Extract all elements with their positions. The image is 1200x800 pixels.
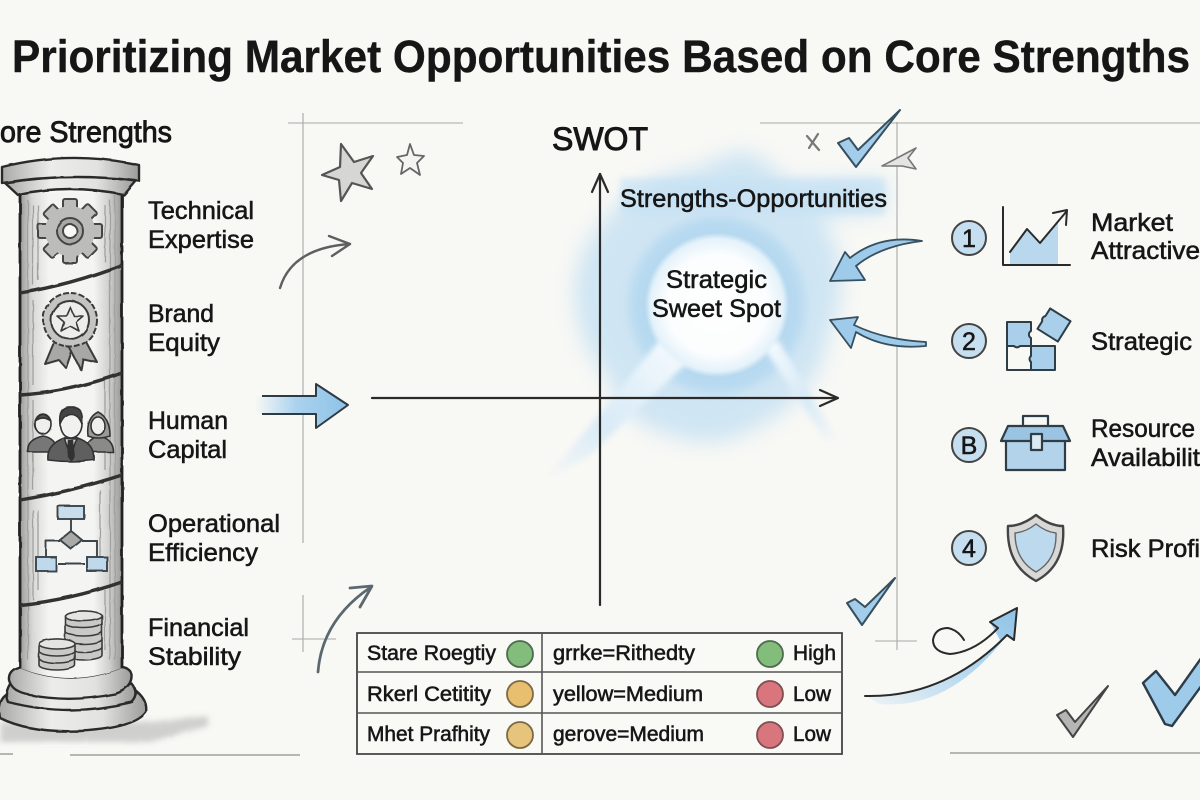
label: Risk Profi [1091,535,1200,563]
label: technical expertise [148,197,254,254]
criterion 2: strategic [952,308,1192,370]
table row 2: Low [793,683,832,706]
arrow: upper curved grey [280,236,350,288]
label: Attractive [1091,237,1200,265]
arrow: lower curved grey [318,586,372,672]
number badge 4 [952,531,986,565]
label: Strategic [1091,328,1192,356]
icon: blue check top [838,110,900,167]
icon: coin stacks [39,611,102,670]
label: financial stability: Financial [148,614,249,642]
number badge 2: 2 [962,328,976,356]
icon: large star [322,144,373,201]
criterion 3: resource availability [952,415,1200,472]
heading: core strengths: ore Strengths [0,116,172,149]
label: human capital: Human [148,407,228,435]
number badge 4: 4 [962,535,976,563]
table row 1: Stare Roegtiy [367,642,497,665]
panel: evaluation criteria [952,207,1200,581]
table row 2: yellow=Medium [553,683,703,706]
criterion 1: market attractiveness [952,207,1200,265]
number badge 1 [952,221,986,255]
table row 1: grrke=Rithedty [553,642,696,665]
icon: toolbox [1001,416,1070,470]
number badge 1: 1 [962,225,976,253]
table row 3: Mhet Prafhity [367,723,490,746]
label: brand equity: Brand [148,300,214,328]
icon: check beside matrix [847,578,895,625]
table row 1: High [793,642,836,665]
horizontal axis [372,390,838,406]
label [1091,415,1200,472]
table row 2: Rkerl Cetitity [367,683,492,706]
icon: flowchart [36,506,107,571]
label: technical expertise: Technical [148,197,254,225]
panel: strength labels [148,197,280,671]
sweet spot label: Strategic [666,266,767,294]
label: financial stability: Stability [148,643,242,671]
label: Market [1091,209,1173,237]
table row 3 [367,722,832,748]
quadrant label: Strengths-Opportunities [620,185,887,213]
label: operational efficiency: Operational [148,510,280,538]
sweet spot label [652,266,781,323]
panel: core strengths pillar [0,158,208,742]
table row 1 [367,641,836,667]
label: operational efficiency [148,510,280,567]
number badge 2 [952,324,986,358]
arrow: strengths into matrix [255,384,348,428]
arrow: criterion 2 to sweet spot [830,317,926,348]
label [1091,209,1200,265]
icon: gear [38,199,102,263]
sweet spot blue wash [575,152,885,442]
icon: grey check [1057,686,1108,737]
arrow: criterion 1 to sweet spot [830,239,922,281]
label: Resource [1091,415,1195,443]
icon: people [28,407,113,462]
icon: large blue check [1143,657,1200,726]
pillar capital [2,158,139,195]
pillar base [0,667,146,731]
table: rating legend [357,633,842,754]
pillar dividers [20,265,122,605]
arrow: swoosh from table [865,608,1017,704]
number badge 3 [952,428,986,462]
label: brand equity: Equity [148,329,221,357]
table row 2 [367,681,832,707]
label: human capital [148,407,228,464]
icon: award badge [43,293,97,370]
label: human capital: Capital [148,436,227,464]
number badge 3: B [961,432,977,460]
light ray right [762,340,838,440]
label: brand equity [148,300,221,357]
icon: puzzle [1007,308,1071,370]
icon: small paper dart [882,148,916,169]
icon: shield [1008,515,1063,581]
pillar shadow [0,716,208,742]
heading: SWOT: SWOT [552,121,648,157]
label: Availabilit [1091,444,1200,472]
light rays [545,340,690,480]
label: technical expertise: Expertise [148,226,254,254]
chart: SWOT matrix [372,121,887,605]
criterion 4: risk profile [952,515,1200,581]
glowing sweet spot circle [645,233,789,377]
sweet spot label: Sweet Spot [652,295,781,323]
icon: growth chart [1003,207,1070,265]
icon: small star [397,144,424,175]
pillar shaft [20,193,122,678]
table row 3: gerove=Medium [553,723,704,746]
label: operational efficiency: Efficiency [148,539,259,567]
icon: small x mark [807,134,819,150]
table row 3: Low [793,723,832,746]
vertical axis [592,174,608,605]
table frame [357,633,842,754]
label: financial stability [148,614,249,671]
